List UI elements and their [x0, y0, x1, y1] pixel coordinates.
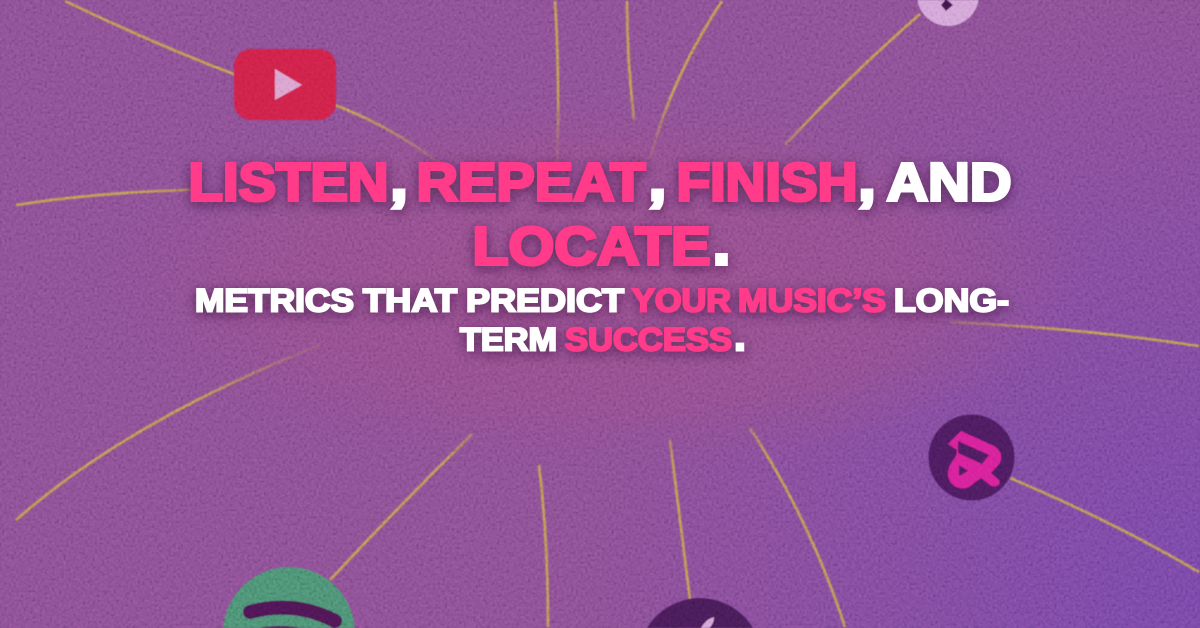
center glow: [90, 90, 1090, 470]
icon: dark circle with pink logo: [928, 414, 1014, 500]
title: ,: [859, 151, 875, 211]
title: .: [714, 216, 729, 276]
icon: dark music circle: [647, 598, 753, 628]
subtitle: YOUR: [632, 282, 731, 318]
subtitle: PREDICT: [466, 282, 625, 318]
title: LOCATE: [472, 216, 710, 276]
title: ,: [391, 151, 407, 211]
title: AND: [886, 152, 1012, 212]
title: [188, 151, 1012, 276]
subtitle: TERM: [460, 322, 557, 358]
subtitle: SUCCESS: [565, 322, 732, 358]
title: ,: [650, 151, 665, 211]
subtitle: MUSIC’S: [738, 282, 886, 318]
subtitle: .: [736, 320, 744, 356]
subtitle: METRICS: [195, 282, 354, 318]
subtitle: THAT: [363, 282, 458, 318]
title: FINISH: [676, 152, 858, 212]
subtitle: LONG-: [894, 282, 1009, 318]
icon: spotify: [223, 567, 355, 628]
icon: youtube: [234, 49, 336, 120]
title: LISTEN: [188, 152, 388, 212]
subtitle: [195, 282, 1009, 358]
icon: lilac circle top right: [917, 0, 979, 26]
title: REPEAT: [416, 152, 646, 212]
